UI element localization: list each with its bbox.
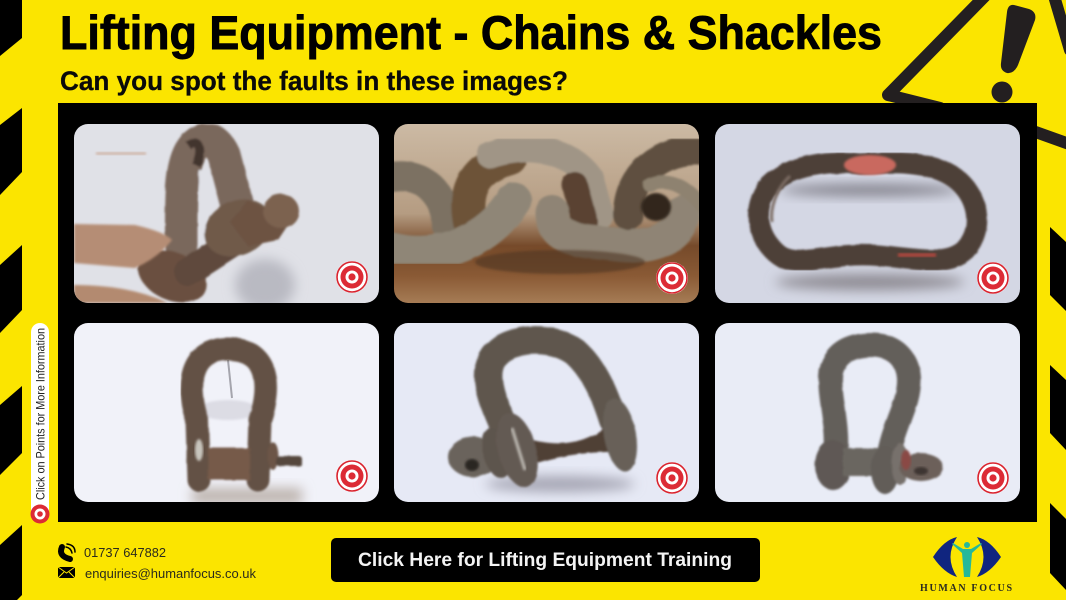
training button: Click Here for Lifting Equipment Training bbox=[358, 549, 732, 571]
logo: Human Focus bbox=[920, 537, 1012, 594]
card 4: bow shackle with rusted pin bbox=[74, 323, 379, 504]
figure bbox=[952, 542, 982, 577]
card 1: shackle held in hand bbox=[74, 124, 379, 313]
eye crescents bbox=[933, 537, 1001, 577]
training button bbox=[331, 538, 760, 582]
icon: email bbox=[58, 567, 75, 578]
side hint pill bbox=[30, 323, 50, 524]
card 5: bent shackle bbox=[394, 323, 699, 502]
icon: exclamation mark bbox=[992, 5, 1035, 103]
warning triangle icon bbox=[888, 0, 1066, 145]
left hazard stripes bbox=[0, 0, 22, 600]
phone number: 01737 647882 bbox=[84, 546, 166, 560]
icon: target bbox=[656, 262, 688, 294]
card 6: grey bow shackle bbox=[715, 323, 1020, 502]
icon: phone bbox=[61, 544, 75, 559]
hint text: Click on Points for More Information bbox=[34, 328, 48, 500]
icon: target bbox=[656, 462, 688, 494]
card 2: chain links bbox=[392, 124, 704, 303]
icon: hint target bbox=[30, 504, 50, 524]
email address: enquiries@humanfocus.co.uk bbox=[85, 567, 257, 581]
icon: target bbox=[977, 462, 1009, 494]
logo wordmark: HUMAN FOCUS bbox=[920, 583, 1012, 594]
icon: target bbox=[336, 460, 368, 492]
icon: target bbox=[977, 262, 1009, 294]
right hazard stripes bbox=[1050, 227, 1066, 590]
subtitle: Can you spot the faults in these images? bbox=[60, 66, 568, 96]
icon: target bbox=[336, 261, 368, 293]
black panel bbox=[58, 103, 1037, 522]
card 3: oval ring bbox=[715, 124, 1020, 303]
title: Lifting Equipment - Chains & Shackles bbox=[60, 6, 882, 59]
